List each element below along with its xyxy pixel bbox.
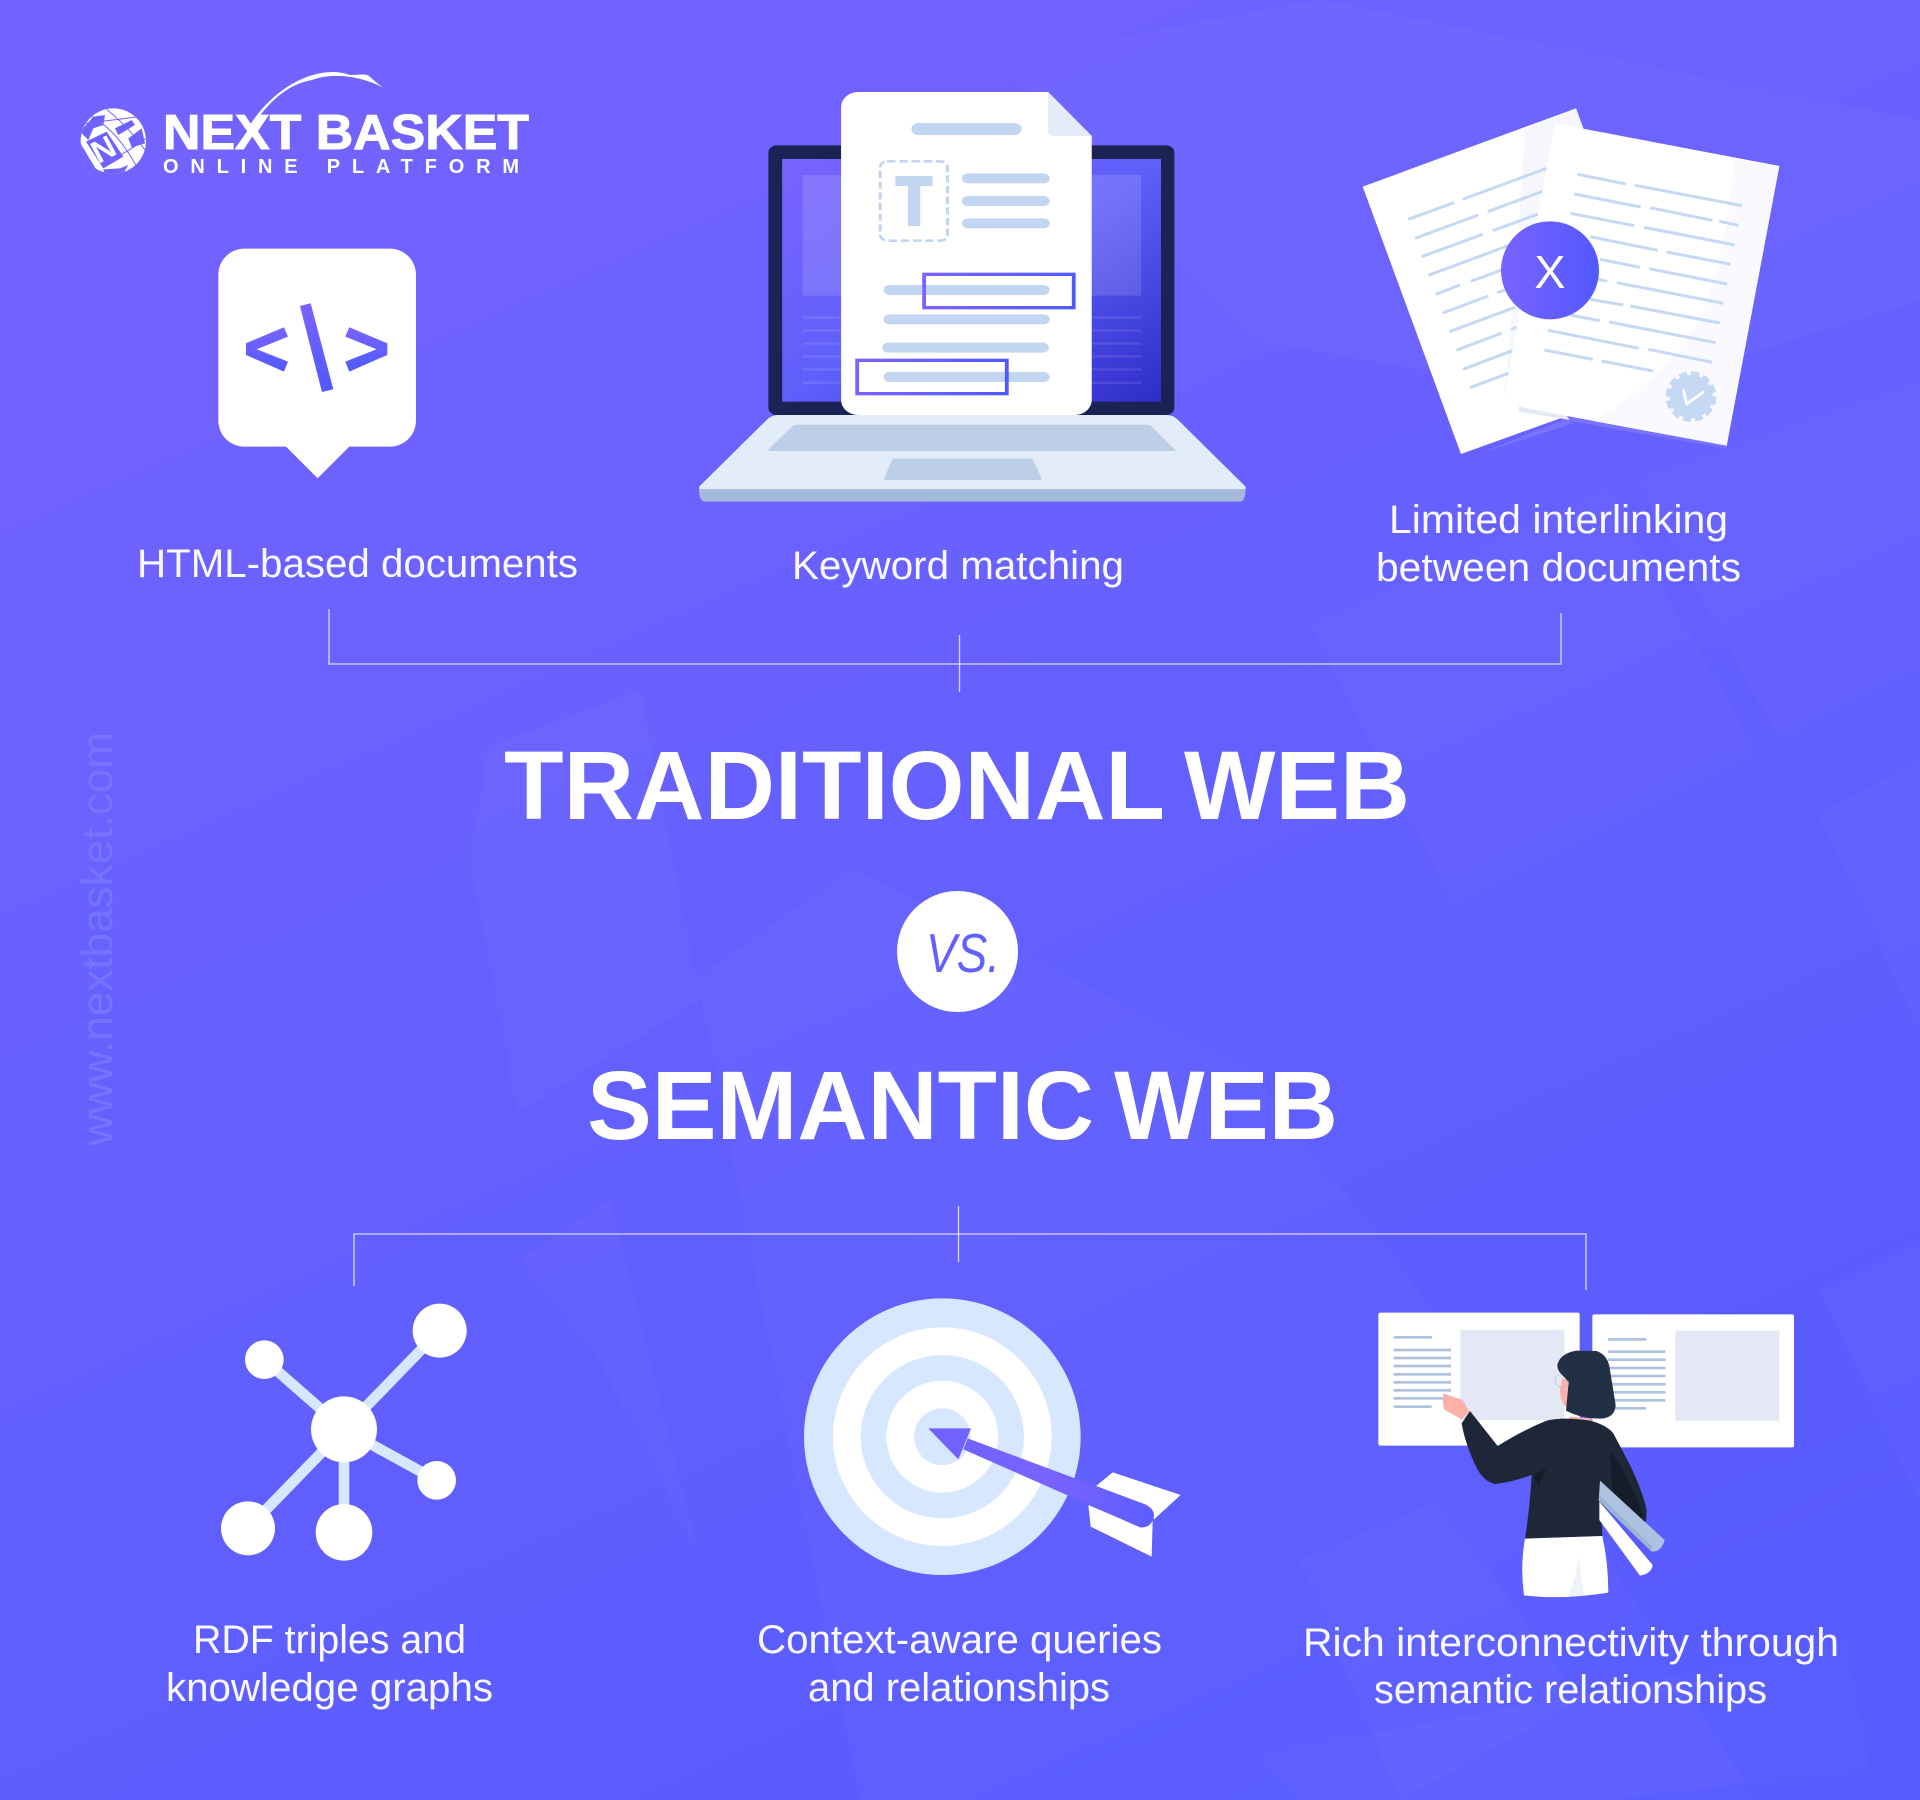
seal badge <box>1668 374 1714 420</box>
icon: knowledge graph <box>221 1304 467 1561</box>
label: Rich interconnectivity: Rich interconnectivity through <box>1303 1621 1839 1665</box>
illustration: person at screens <box>1378 1313 1794 1597</box>
icon: overlapping documents with X <box>1363 108 1779 454</box>
X circle <box>1501 221 1599 319</box>
logo globe <box>80 108 146 175</box>
laptop screen <box>768 145 1174 415</box>
arrow <box>928 1428 1181 1557</box>
label: Limited interlinking <box>1376 498 1741 590</box>
label: Keyword matching: Keyword matching <box>792 544 1124 588</box>
label: HTML-based documents: HTML-based documents <box>137 542 578 586</box>
label: RDF triples <box>166 1618 493 1710</box>
heading: Semantic Web: WEB <box>1114 1051 1338 1160</box>
icon: laptop with document <box>699 92 1246 502</box>
label: Context-aware queries: Context-aware queries <box>757 1618 1162 1662</box>
heading: Semantic Web <box>587 1051 1338 1160</box>
logo tagline: ONLINE PLATFORM <box>163 156 519 178</box>
label: Rich interconnectivity <box>1303 1621 1839 1712</box>
logo wordmark: NEXT BASKET <box>163 106 529 160</box>
heading: Traditional Web: TRADITIONAL <box>504 731 1165 840</box>
label: Limited interlinking: between documents <box>1376 546 1741 590</box>
logo globe: N <box>85 129 122 170</box>
left panel <box>1378 1313 1580 1446</box>
document <box>841 92 1092 415</box>
logo <box>80 72 529 178</box>
heading: Traditional Web: WEB <box>1184 731 1410 840</box>
vs badge <box>897 891 1018 1012</box>
laptop base <box>699 415 1246 502</box>
connector: bottom bracket <box>354 1206 1586 1290</box>
front page <box>1503 123 1779 448</box>
label: RDF triples: knowledge graphs <box>166 1666 493 1710</box>
person <box>1443 1351 1665 1597</box>
vs badge: VS. <box>926 922 1000 984</box>
label: Context-aware queries <box>757 1618 1162 1710</box>
icon: target with arrow <box>804 1298 1181 1575</box>
label: RDF triples: RDF triples and <box>193 1618 466 1662</box>
label: Context-aware queries: and relationships <box>808 1666 1110 1710</box>
right panel <box>1592 1314 1794 1447</box>
icon: code speech bubble <box>218 249 416 478</box>
label: Rich interconnectivity: semantic relationships <box>1374 1668 1767 1712</box>
heading: Semantic Web: SEMANTIC <box>587 1051 1094 1160</box>
target rings <box>804 1298 1081 1575</box>
connector: top bracket <box>329 609 1561 692</box>
X circle: X <box>1534 246 1566 298</box>
watermark: www.nextbasket.com <box>73 732 122 1147</box>
label: Limited interlinking: Limited interlinking <box>1389 498 1728 542</box>
back page <box>1363 108 1583 454</box>
logo swoosh <box>248 72 384 128</box>
